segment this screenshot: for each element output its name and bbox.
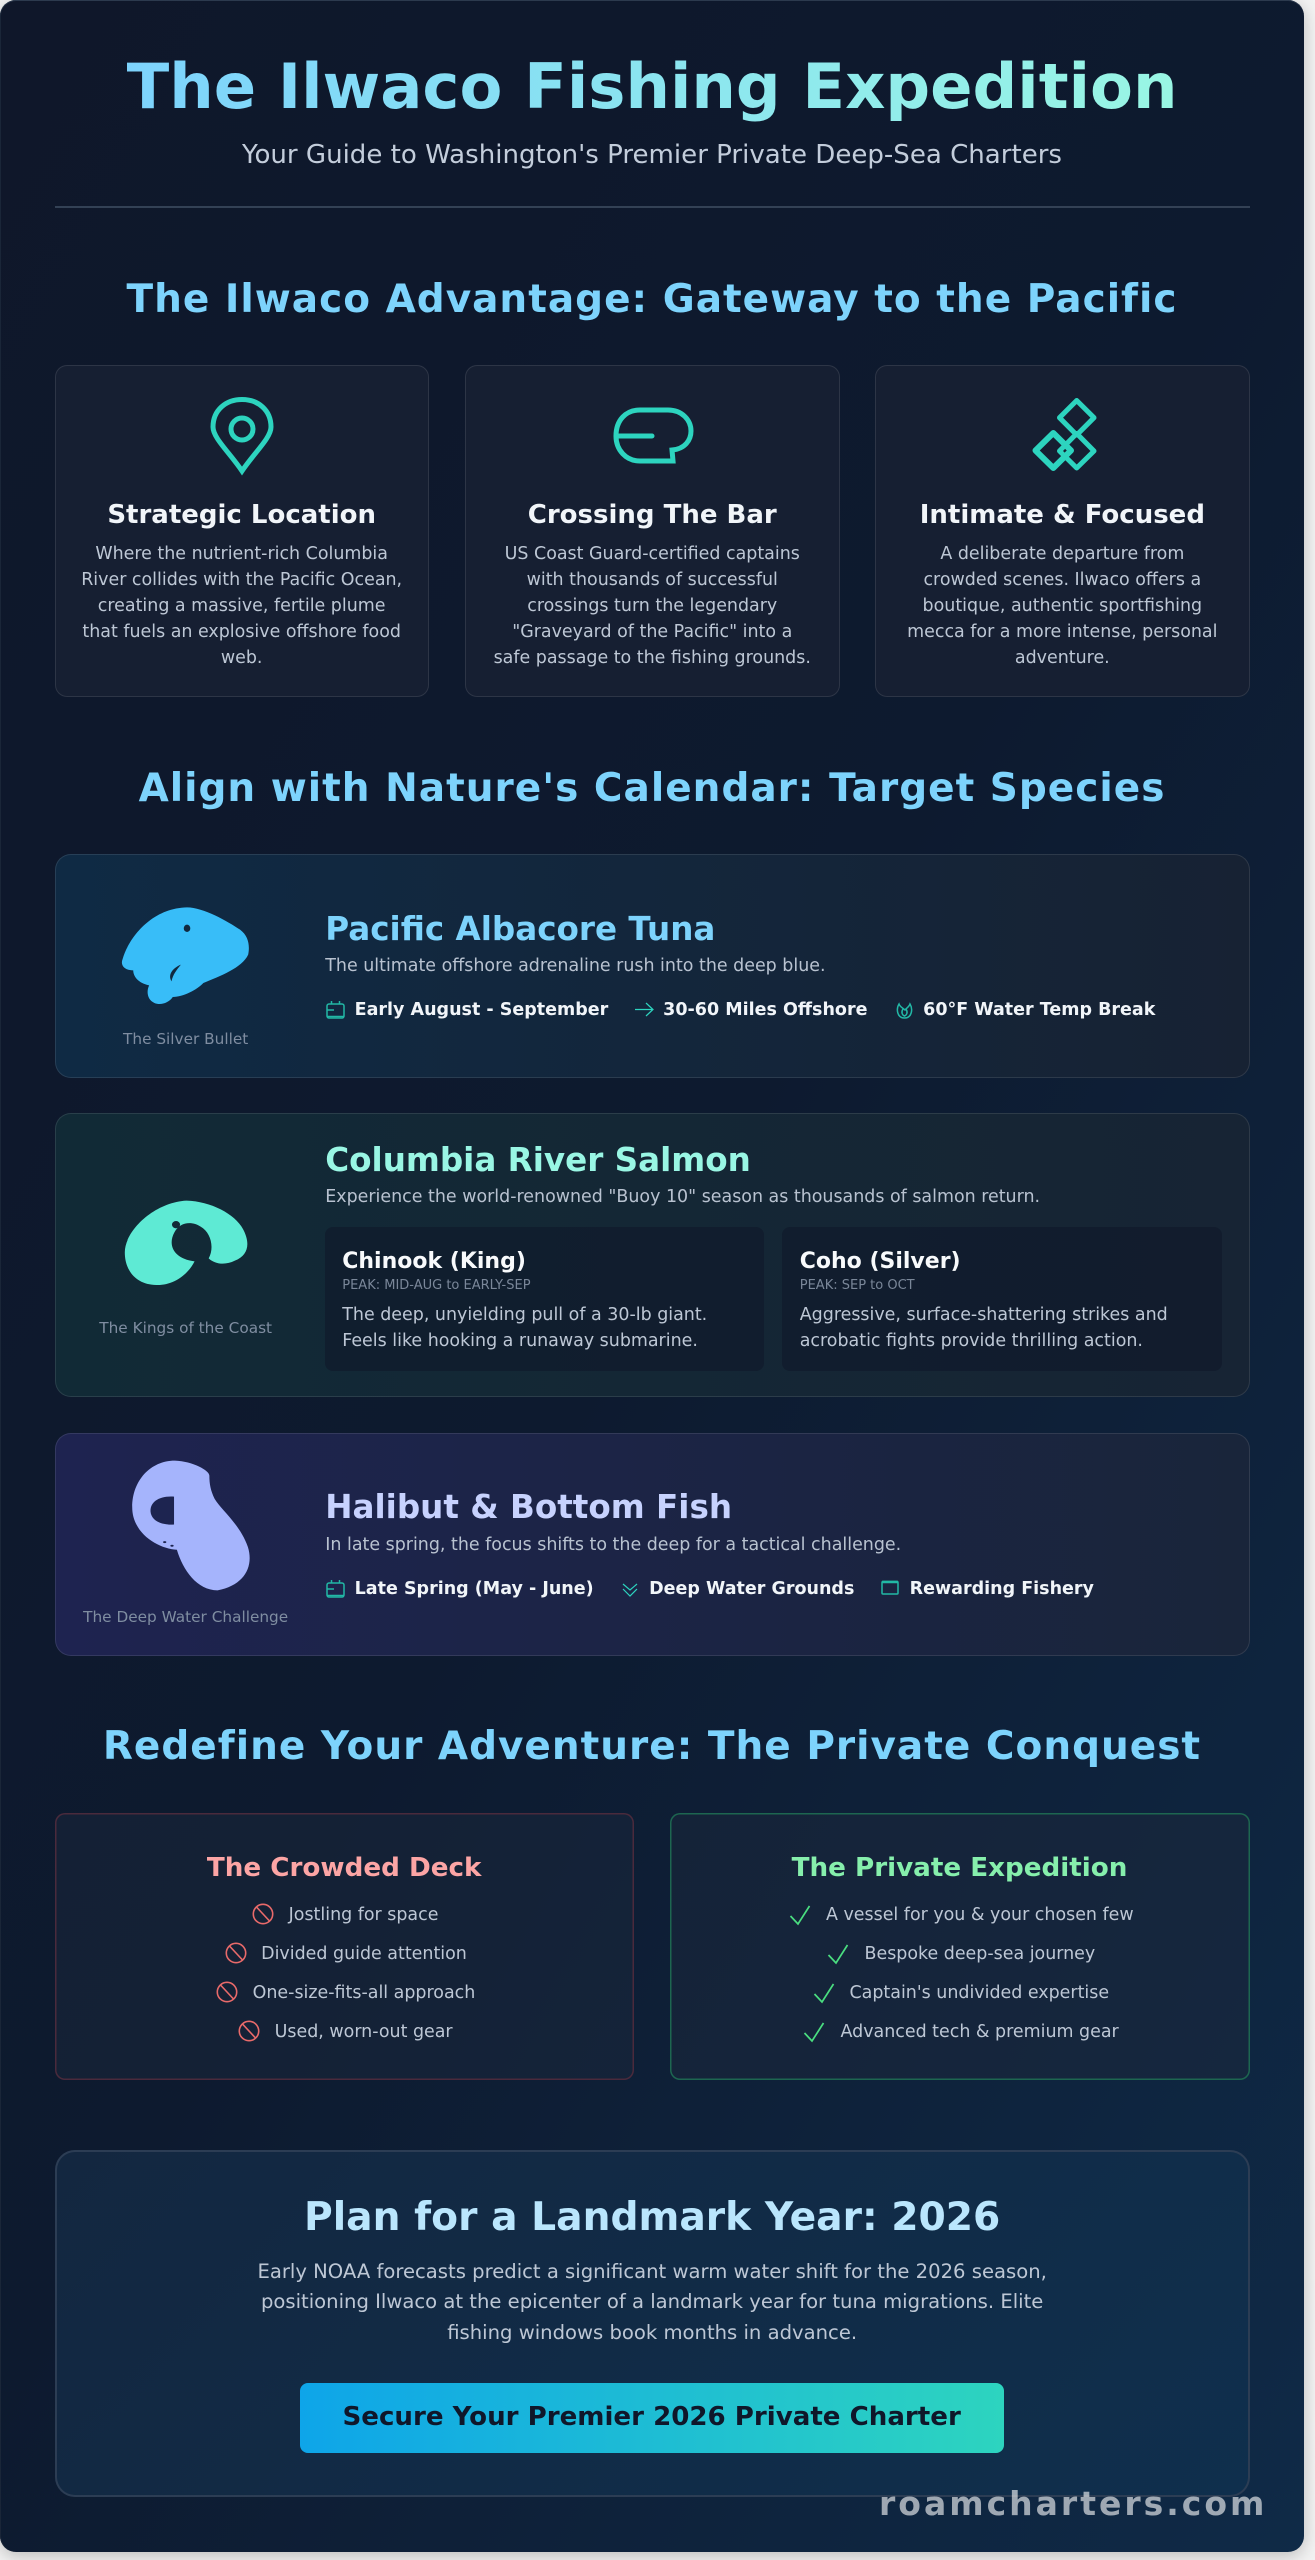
- icon: salmon: [124, 1200, 248, 1285]
- feature: distance: 30-60 Miles Offshore: [663, 1000, 867, 1020]
- text: intimate and focused: boutique, authentic sportfishing: [923, 596, 1202, 616]
- heading: intimate and focused: Intimate & Focused: [920, 500, 1205, 530]
- icon: double chevron: [622, 1584, 638, 1597]
- icon: overlapping diamonds: [1032, 398, 1096, 471]
- item: a vessel: A vessel for you & your chosen few: [826, 1905, 1134, 1925]
- text: coho: Aggressive, surface-shattering strikes and: [800, 1304, 1168, 1324]
- heading: the private expedition: The Private Expedition: [792, 1852, 1127, 1882]
- icon: halibut: [132, 1460, 250, 1590]
- icon: arrow: [635, 1002, 654, 1016]
- text: crossing the bar: "Graveyard of the Pacific" into a: [512, 622, 792, 642]
- watermark: roamcharters.com: roamcharters.com: [879, 2484, 1267, 2523]
- icon: crossing the bar: [614, 408, 694, 464]
- text: forecast: Early NOAA forecasts predict a significant warm water shift for the 2026 season,: [257, 2260, 1047, 2282]
- text: chinook: [342, 1304, 707, 1351]
- heading: coho: Coho (Silver): [800, 1248, 961, 1274]
- feature: water temperature: 60°F Water Temp Break: [923, 1000, 1155, 1020]
- heading: halibut and bottom fish: Halibut & Bottom Fish: [325, 1488, 732, 1526]
- heading: the crowded deck: The Crowded Deck: [207, 1852, 481, 1882]
- caption: deep water challenge: The Deep Water Challenge: [83, 1608, 288, 1626]
- description: halibut: In late spring, the focus shifts to the deep for a tactical challenge.: [325, 1534, 901, 1554]
- text: strategic location: creating a massive, fertile plume: [98, 596, 386, 616]
- icon: water drop: [896, 1002, 912, 1019]
- text: forecast: fishing windows book months in advance.: [447, 2321, 857, 2344]
- panel: halibut and bottom fish: [55, 1433, 1250, 1656]
- peak season: coho: PEAK: SEP to OCT: [800, 1278, 915, 1293]
- text: forecast: positioning Ilwaco at the epicenter of a landmark year for tuna migrations. Elite: [261, 2290, 1043, 2313]
- text: intimate and focused: [907, 544, 1217, 668]
- subtitle: Your Guide to Washington's Premier Private Deep-Sea Charters: [242, 140, 1062, 170]
- button: secure your charter: [300, 2383, 1004, 2453]
- icon: prohibited: [226, 1942, 246, 1964]
- panel: columbia river salmon: [55, 1113, 1250, 1397]
- description: tuna: The ultimate offshore adrenaline rush into the deep blue.: [325, 956, 826, 976]
- heading: target species: Align with Nature's Calendar: Target Species: [139, 766, 1165, 810]
- icon: check: [790, 1906, 810, 1926]
- icon: prohibited: [252, 1904, 274, 1924]
- heading: chinook: Chinook (King): [342, 1248, 526, 1274]
- panel: pacific albacore tuna: [55, 854, 1250, 1078]
- text: strategic location: web.: [221, 648, 262, 668]
- item: one size fits all: One-size-fits-all approach: [253, 1983, 475, 2003]
- text: strategic location: Where the nutrient-rich Columbia: [95, 544, 388, 564]
- icon: calendar: [326, 1580, 345, 1598]
- text: coho: [800, 1304, 1168, 1351]
- text: crossing the bar: with thousands of successful: [527, 570, 778, 590]
- icon: calendar: [326, 1001, 345, 1019]
- text: crossing the bar: [494, 544, 811, 668]
- icon: prohibited: [238, 2020, 260, 2042]
- heading: private conquest: Redefine Your Adventure: The Private Conquest: [103, 1724, 1201, 1769]
- icon: tuna: [122, 907, 249, 1004]
- text: coho: acrobatic fights provide thrilling action.: [800, 1331, 1143, 1351]
- item: advanced tech: Advanced tech & premium gear: [840, 2022, 1119, 2042]
- icon: check: [814, 1983, 834, 2003]
- title: The Ilwaco Fishing Expedition: [127, 50, 1177, 123]
- heading: plan for a landmark year: Plan for a Landmark Year: 2026: [304, 2194, 1000, 2240]
- text: strategic location: River collides with the Pacific Ocean,: [81, 570, 402, 590]
- feature: fishery: Rewarding Fishery: [910, 1578, 1094, 1598]
- text: chinook: Feels like hooking a runaway submarine.: [342, 1331, 698, 1351]
- sub-panel: coho: [782, 1227, 1222, 1371]
- item: divided guide attention: Divided guide attention: [261, 1944, 467, 1964]
- text: crossing the bar: crossings turn the legendary: [527, 596, 777, 616]
- panel: strategic location: [55, 365, 429, 697]
- caption: the silver bullet: The Silver Bullet: [123, 1030, 248, 1048]
- panel: crossing the bar: [464, 365, 840, 697]
- icon: check: [804, 2022, 824, 2042]
- heading: columbia river salmon: Columbia River Salmon: [325, 1140, 751, 1178]
- heading: strategic location: Strategic Location: [107, 500, 376, 530]
- text: strategic location: that fuels an explosive offshore food: [82, 622, 401, 642]
- text: intimate and focused: A deliberate departure from: [940, 544, 1184, 564]
- peak season: chinook: PEAK: MID-AUG to EARLY-SEP: [342, 1278, 531, 1293]
- icon: map pin: [210, 397, 274, 476]
- text: crossing the bar: US Coast Guard-certified captains: [505, 544, 800, 564]
- heading: the Ilwaco advantage: The Ilwaco Advantage: Gateway to the Pacific: [126, 276, 1178, 322]
- text: chinook: The deep, unyielding pull of a 30-lb giant.: [342, 1304, 707, 1324]
- feature: season: Late Spring (May - June): [355, 1578, 594, 1598]
- item: bespoke journey: Bespoke deep-sea journey: [864, 1944, 1095, 1964]
- text: strategic location: [81, 544, 402, 668]
- heading: crossing the bar: Crossing The Bar: [528, 500, 777, 530]
- icon: check: [828, 1944, 848, 1964]
- heading: pacific albacore tuna: Pacific Albacore Tuna: [325, 910, 715, 948]
- panel: the crowded deck: [55, 1813, 634, 2080]
- caption: kings of the coast: The Kings of the Coast: [99, 1319, 272, 1337]
- feature: grounds: Deep Water Grounds: [649, 1578, 854, 1598]
- item: jostling for space: Jostling for space: [289, 1905, 438, 1925]
- panel: plan for 2026 call to action: [55, 2150, 1250, 2497]
- item: used gear: Used, worn-out gear: [275, 2022, 453, 2042]
- icon: prohibited: [216, 1982, 238, 2002]
- text: intimate and focused: mecca for a more intense, personal: [907, 622, 1217, 642]
- sub-panel: chinook: [325, 1227, 764, 1371]
- feature: season: Early August - September: [355, 1000, 608, 1020]
- text: crossing the bar: safe passage to the fishing grounds.: [494, 648, 811, 668]
- item: captain expertise: Captain's undivided expertise: [850, 1983, 1109, 2003]
- text: forecast: [55, 2256, 1250, 2349]
- text: intimate and focused: crowded scenes. Ilwaco offers a: [923, 570, 1201, 590]
- icon: box: [881, 1580, 899, 1595]
- text: intimate and focused: adventure.: [1015, 648, 1110, 668]
- description: salmon: Experience the world-renowned "Buoy 10" season as thousands of salmon return.: [325, 1187, 1040, 1207]
- panel: intimate and focused: [875, 365, 1250, 697]
- panel: the private expedition: [670, 1813, 1250, 2080]
- button: secure your charter: Secure Your Premier 2026 Private Charter: [342, 2402, 961, 2432]
